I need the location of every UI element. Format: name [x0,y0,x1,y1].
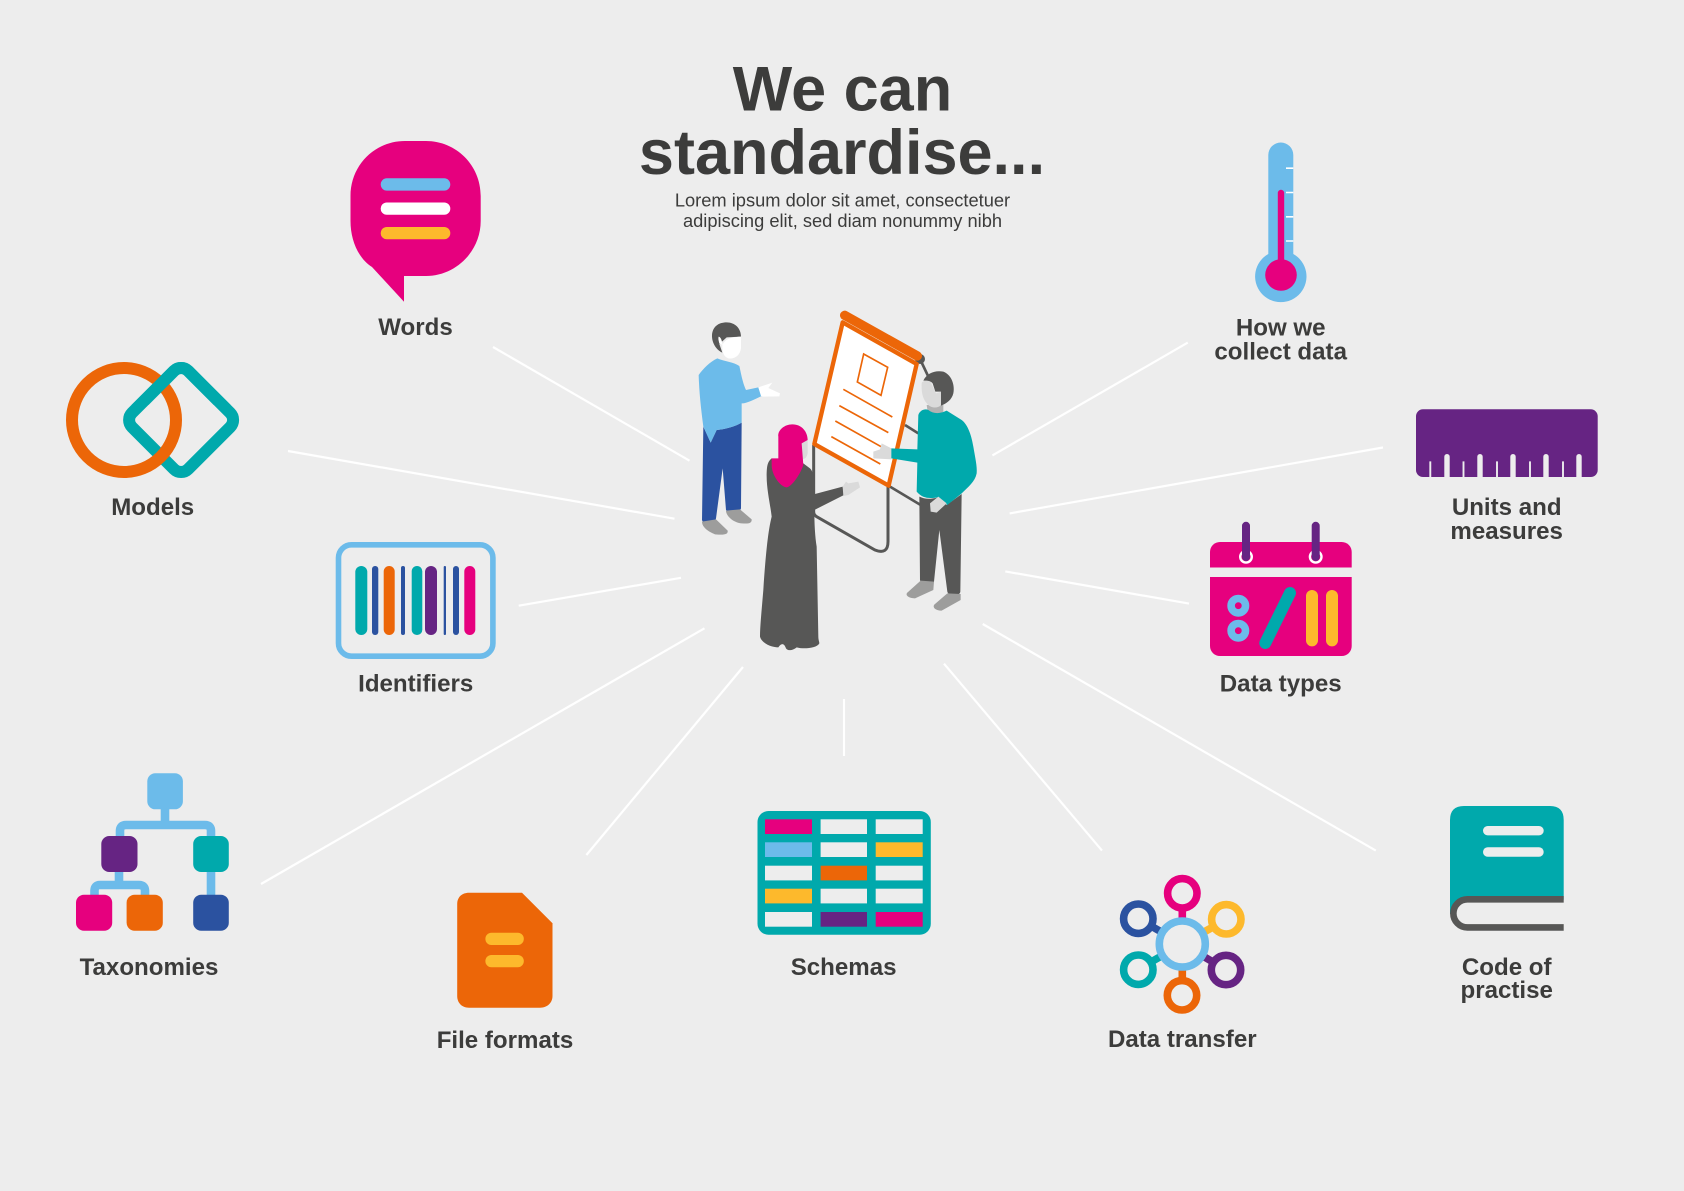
subtitle text: Lorem ipsum dolor sit amet, consectetuer [675,190,1010,211]
title [639,55,1045,188]
panel: data types [1210,526,1352,698]
label: File formats [437,1027,573,1054]
title: We can [733,55,952,125]
label: Models [111,494,194,521]
icon: file [457,893,552,1008]
icon: circle and diamond [72,364,237,476]
label: Schemas [791,954,897,981]
icon: book [1450,806,1564,927]
icon: network hub [1124,879,1241,1010]
label: practise [1460,977,1553,1004]
panel: units and measures [1416,409,1598,545]
label: Taxonomies [80,954,218,981]
subtitle text: adipiscing elit, sed diam nonummy nibh [683,210,1002,231]
label: Words [378,314,453,341]
icon: table [758,811,931,935]
label: collect data [1214,338,1348,365]
label [1214,314,1348,365]
icon: thermometer [1255,142,1306,302]
flip chart [814,315,929,551]
person in blue [699,322,780,535]
panel: identifiers [338,545,493,698]
label [1460,954,1553,1004]
label [1450,494,1563,545]
title: standardise... [639,118,1045,188]
icon: calendar [1210,526,1352,656]
icon: barcode [338,545,493,656]
label: Data types [1220,670,1342,698]
connector lines [261,343,1383,884]
label: measures [1450,518,1563,545]
panel: models [72,364,237,521]
icon: speech bubble [350,141,481,302]
label: Data transfer [1108,1026,1257,1053]
panel: taxonomies [76,773,229,981]
panel: data transfer [1108,879,1257,1053]
panel: code of practise [1450,806,1564,1004]
central illustration: three people at a flip chart [699,315,977,650]
label: Code of [1462,954,1553,981]
panel: how we collect data [1214,142,1348,365]
panel: schemas [758,811,931,981]
label: How we [1236,314,1326,341]
label: Identifiers [358,670,473,698]
icon: tree [76,773,229,931]
label: Units and [1452,494,1562,521]
panel: words [350,141,481,341]
person in teal [873,371,977,611]
icon: ruler [1416,409,1598,477]
subtitle text [675,190,1010,231]
panel: file formats [437,893,573,1054]
person in hijab [760,424,860,650]
